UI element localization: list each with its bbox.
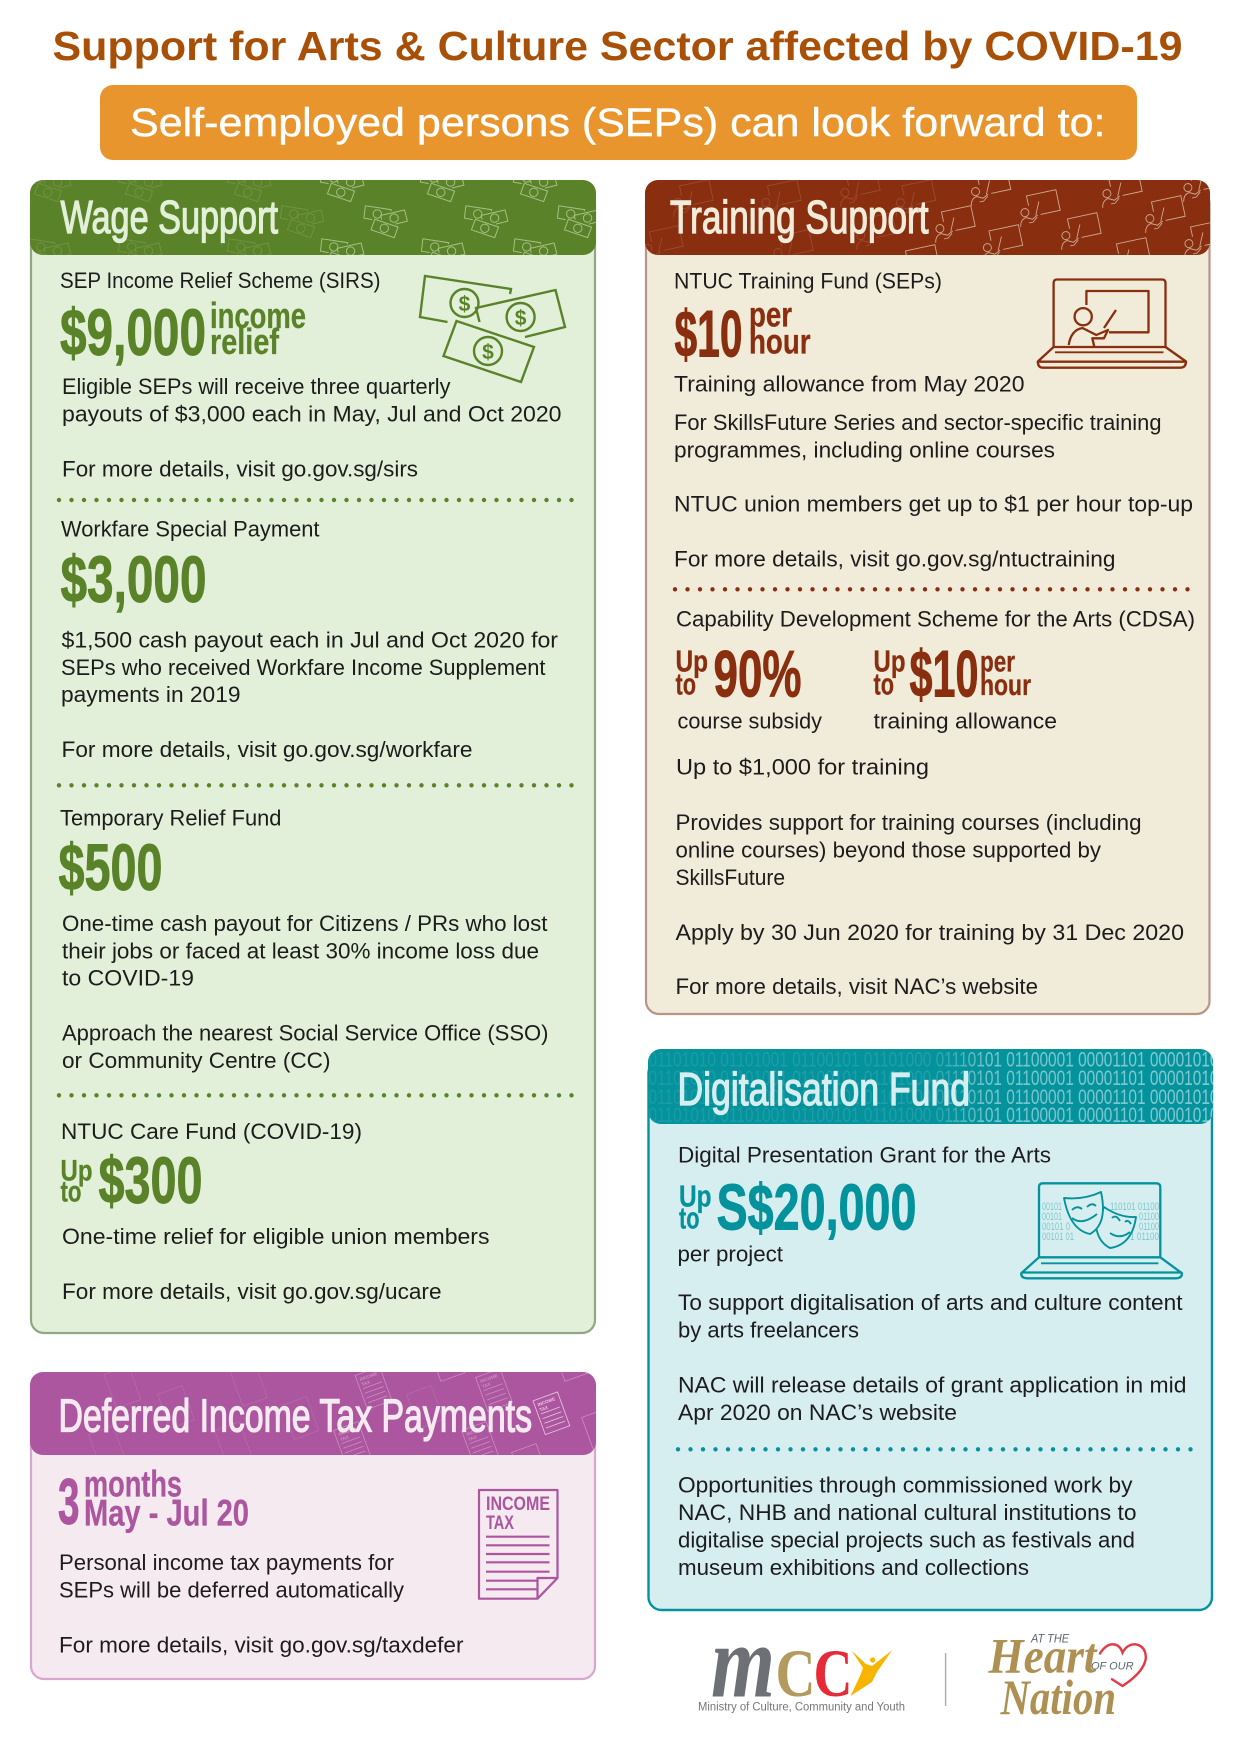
amount: 3 months May - Jul 20 — [58, 1464, 249, 1538]
section: Workfare Special Payment: For more details, visit go.gov.sg/workfare — [62, 737, 472, 762]
text: deferred tax description: For more details, visit go.gov.sg/taxdefer — [59, 1632, 464, 1658]
panel: deferred income tax payments — [30, 1372, 596, 1680]
section: Temporary Relief Fund: Temporary Relief Fund — [60, 806, 282, 830]
section: Digital Presentation Grant: Apr 2020 on NAC’s website — [678, 1400, 957, 1425]
amount: 3 months May - Jul 20: months — [84, 1464, 182, 1504]
panel: wage support — [27, 170, 601, 1333]
text: deferred tax description: SEPs will be deferred automatically — [59, 1578, 404, 1602]
title: Support for Arts & Culture Sector affected by COVID-19 — [52, 23, 1182, 69]
section: Temporary Relief Fund: to COVID-19 — [62, 966, 194, 990]
logo: MCCY: m — [711, 1604, 775, 1720]
icon: income tax document: INCOME — [486, 1494, 550, 1515]
amount: up to $10 per hour: hour — [980, 669, 1031, 702]
icon: money bills — [420, 276, 565, 382]
amount: up to $300: Up — [60, 1154, 92, 1188]
logo: At the Heart of Our Nation: AT THE — [1030, 1632, 1070, 1646]
section: Capability Development Scheme for the Arts — [676, 606, 1195, 999]
icon: laptop with theatre masks: 110101 01100 — [1110, 1201, 1159, 1213]
section: Digital Presentation Grant — [678, 1142, 1186, 1425]
section: Workfare Special Payment — [60, 516, 558, 762]
icon: money bills: $ — [515, 307, 527, 330]
amount: 3 months May - Jul 20: May - Jul 20 — [84, 1492, 249, 1534]
amount: up to 90%: to — [676, 666, 696, 702]
section: NTUC Training Fund: Training allowance from May 2020 — [674, 372, 1024, 396]
icon: laptop with theatre masks: 00101 0 — [1042, 1221, 1070, 1233]
panel: training support — [638, 165, 1226, 1014]
section: Capability Development Scheme for the Arts: online courses) beyond those supported by — [676, 838, 1101, 862]
logo: MCCY — [698, 1604, 905, 1720]
text: opportunities: Opportunities through commissioned work by — [678, 1472, 1132, 1498]
header: training support — [645, 180, 1210, 255]
section: NTUC Training Fund: For SkillsFuture Series and sector-specific training — [674, 410, 1162, 435]
amount: up to 90% — [676, 636, 802, 710]
section: Workfare Special Payment: payments in 2019 — [61, 682, 240, 707]
amount: up to $300: $300 — [98, 1143, 202, 1217]
text: opportunities: museum exhibitions and collections — [678, 1555, 1029, 1580]
section: Temporary Relief Fund: or Community Centre (CC) — [62, 1048, 330, 1073]
amount: up to S$20,000: Up — [679, 1178, 712, 1214]
section: SEP Income Relief Scheme — [60, 268, 565, 482]
section: NTUC Training Fund: NTUC union members get up to $1 per hour top-up — [674, 492, 1193, 516]
section: SEP Income Relief Scheme: SEP Income Relief Scheme (SIRS) — [60, 268, 380, 293]
header: deferred income tax: INCOME — [337, 1426, 356, 1437]
header: deferred income tax: TAX — [339, 1434, 350, 1442]
section: Digital Presentation Grant: Digital Presentation Grant for the Arts — [678, 1142, 1051, 1168]
header: deferred income tax: INCOME — [537, 1396, 556, 1407]
section: Digital Presentation Grant: per project — [678, 1242, 783, 1266]
amount: up to $10 per hour: to — [874, 666, 894, 702]
logo: At the Heart of Our Nation: Heart — [988, 1628, 1098, 1684]
amount: $10 per hour: per — [749, 296, 792, 334]
logo: MCCY: C — [776, 1635, 816, 1711]
section: Capability Development Scheme for the Arts: For more details, visit NAC’s website — [676, 974, 1038, 999]
icon: laptop with theatre masks: 00101 — [1042, 1201, 1062, 1213]
panel: digitalisation fund — [648, 1048, 1218, 1610]
icon: laptop with theatre masks — [1021, 1183, 1182, 1278]
banner: self-employed persons: Self-employed persons (SEPs) can look forward to: — [130, 101, 1106, 145]
section: Capability Development Scheme for the Arts: Up to $1,000 for training — [676, 754, 929, 780]
section: Capability Development Scheme for the Arts: course subsidy — [678, 708, 822, 734]
text: opportunities: NAC, NHB and national cultural institutions to — [678, 1500, 1136, 1525]
amount: up to 90%: Up — [676, 644, 708, 678]
amount: up to $10 per hour: Up — [874, 644, 906, 678]
amount: $9,000 income relief: $9,000 — [60, 295, 206, 369]
banner: self-employed persons — [100, 85, 1137, 160]
section: Workfare Special Payment: Workfare Special Payment — [61, 516, 320, 542]
amount: 3 months May - Jul 20: 3 — [58, 1465, 80, 1538]
section: NTUC Training Fund: programmes, including online courses — [674, 438, 1055, 462]
text: deferred tax description: Personal income tax payments for — [59, 1550, 394, 1575]
section: NTUC Care Fund: For more details, visit go.gov.sg/ucare — [62, 1279, 442, 1304]
section: Temporary Relief Fund: their jobs or faced at least 30% income loss due — [62, 938, 539, 964]
heading: training support: Training Support — [670, 191, 929, 243]
amount: up to 90%: 90% — [714, 636, 802, 710]
text: deferred tax description — [59, 1550, 464, 1658]
section: Digital Presentation Grant: To support digitalisation of arts and culture content — [678, 1290, 1182, 1315]
header: deferred income tax: TAX — [481, 1381, 492, 1389]
section: Temporary Relief Fund: Approach the nearest Social Service Office (SSO) — [62, 1020, 548, 1046]
heading: deferred income tax payments: Deferred Income Tax Payments — [58, 1390, 532, 1442]
section: Workfare Special Payment: SEPs who received Workfare Income Supplement — [61, 655, 546, 680]
amount: up to $10 per hour — [874, 636, 1031, 710]
header: digitalisation fund — [648, 1048, 1218, 1127]
icon: laptop with theatre masks: 00101 01 — [1042, 1231, 1074, 1243]
icon: laptop with theatre masks: 01100 — [1139, 1211, 1159, 1223]
header: deferred income tax: TAX — [539, 1404, 550, 1412]
icon: laptop with theatre masks: 00101 — [1042, 1211, 1062, 1223]
logo: At the Heart of Our Nation — [988, 1628, 1146, 1725]
section: NTUC Care Fund: NTUC Care Fund (COVID-19) — [61, 1119, 362, 1144]
logo: MCCY: Ministry of Culture, Community and Youth — [698, 1702, 905, 1714]
section: SEP Income Relief Scheme: Eligible SEPs will receive three quarterly — [62, 374, 450, 399]
heading: wage support: Wage Support — [60, 191, 278, 243]
amount: $500: $500 — [58, 830, 162, 904]
amount: $3,000: $3,000 — [60, 542, 206, 616]
section: Temporary Relief Fund: One-time cash payout for Citizens / PRs who lost — [62, 911, 548, 936]
amount: $9,000 income relief: income — [210, 295, 306, 336]
section: NTUC Training Fund — [674, 268, 1193, 572]
section: Workfare Special Payment: $1,500 cash payout each in Jul and Oct 2020 for — [62, 628, 558, 652]
section: Capability Development Scheme for the Arts: Apply by 30 Jun 2020 for training by 31 Dec 2020 — [676, 920, 1184, 945]
icon: income tax document: TAX — [486, 1513, 514, 1534]
section: Digital Presentation Grant: by arts freelancers — [678, 1318, 859, 1342]
section: Capability Development Scheme for the Arts: training allowance — [874, 708, 1057, 734]
header: deferred income tax: TAX — [467, 1434, 478, 1442]
amount: $10 per hour: hour — [749, 322, 811, 362]
icon: online teacher laptop — [1038, 280, 1186, 368]
section: Capability Development Scheme for the Arts: Capability Development Scheme for the Arts (CDSA) — [676, 606, 1195, 632]
amount: up to $10 per hour: per — [980, 646, 1015, 678]
section: SEP Income Relief Scheme: For more details, visit go.gov.sg/sirs — [62, 456, 418, 482]
amount: up to $300: to — [60, 1176, 82, 1208]
logo: At the Heart of Our Nation: Nation — [1000, 1669, 1116, 1725]
logo: MCCY: C — [814, 1635, 852, 1711]
logo: At the Heart of Our Nation: OF OUR — [1091, 1660, 1134, 1672]
section: NTUC Care Fund: One-time relief for eligible union members — [62, 1224, 490, 1249]
amount: up to $300 — [60, 1143, 202, 1217]
section: Capability Development Scheme for the Arts: Provides support for training courses (including — [676, 810, 1142, 835]
amount: up to S$20,000 — [679, 1170, 916, 1244]
amount: $9,000 income relief: relief — [210, 321, 280, 362]
amount: up to S$20,000: to — [679, 1200, 700, 1236]
icon: income tax document — [479, 1490, 558, 1599]
section: Digital Presentation Grant: NAC will release details of grant application in mid — [678, 1372, 1186, 1398]
section: Temporary Relief Fund — [58, 806, 548, 1073]
header: deferred income tax: INCOME — [465, 1426, 484, 1437]
section: NTUC Training Fund: NTUC Training Fund (SEPs) — [674, 268, 942, 294]
icon: money bills: $ — [482, 341, 494, 364]
section: SEP Income Relief Scheme: payouts of $3,000 each in May, Jul and Oct 2020 — [62, 402, 562, 426]
icon: money bills: $ — [459, 293, 471, 316]
header: wage support — [30, 180, 596, 255]
amount: up to S$20,000: S$20,000 — [716, 1170, 916, 1244]
section: Capability Development Scheme for the Arts: SkillsFuture — [676, 865, 785, 890]
icon: laptop with theatre masks: 1 01100 — [1130, 1231, 1159, 1243]
text: opportunities — [678, 1472, 1136, 1580]
section: NTUC Training Fund: For more details, visit go.gov.sg/ntuctraining — [674, 546, 1116, 572]
header: deferred income tax: TAX — [361, 1379, 372, 1387]
amount: $10 per hour: $10 — [674, 296, 742, 370]
text: opportunities: digitalise special projects such as festivals and — [678, 1528, 1135, 1552]
header: deferred income tax: INCOME — [479, 1373, 498, 1384]
icon: laptop with theatre masks: 01100 — [1139, 1221, 1159, 1233]
amount: up to $10 per hour: $10 — [910, 636, 978, 710]
section: NTUC Care Fund — [60, 1119, 490, 1304]
header: deferred income tax — [30, 1372, 596, 1455]
heading: digitalisation fund: Digitalisation Fund — [678, 1063, 970, 1115]
header: deferred income tax: INCOME — [359, 1371, 378, 1382]
